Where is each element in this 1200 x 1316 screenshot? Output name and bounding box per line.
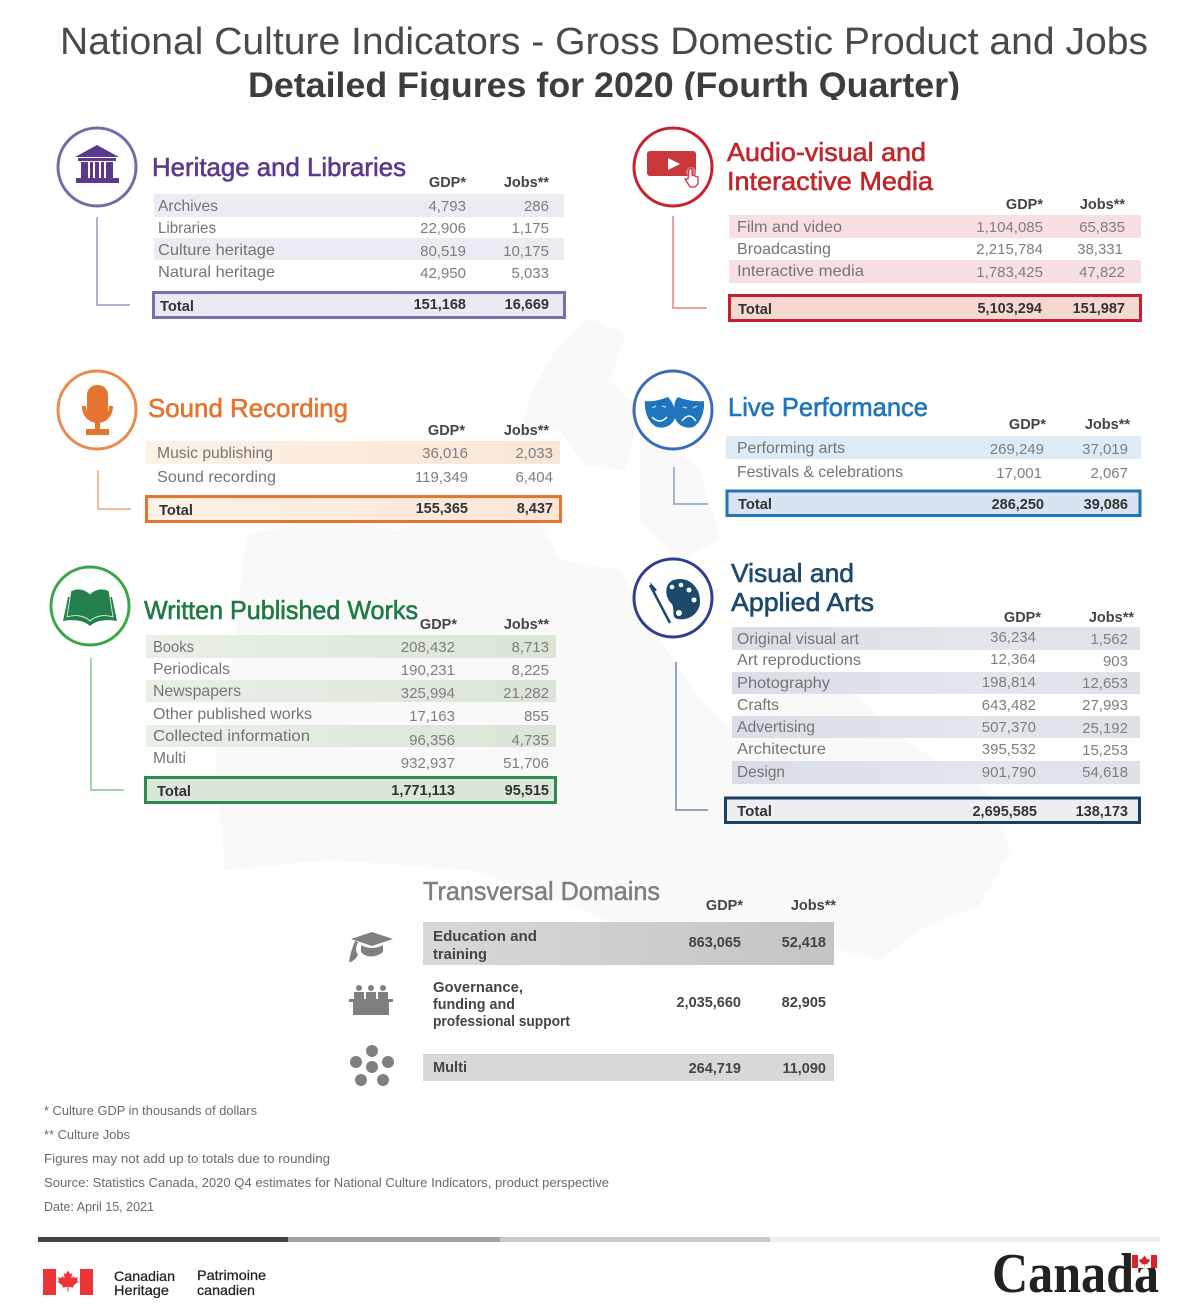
- heading: Heritage and Libraries: [152, 152, 406, 182]
- footnotes: Date: April 15, 2021: [44, 1199, 154, 1214]
- table rows: 17,163: [409, 708, 455, 725]
- table rows: 37,019: [1082, 441, 1128, 458]
- table rows: 12,653: [1082, 675, 1128, 692]
- column headers: Jobs**: [1085, 417, 1130, 433]
- table rows: 47,822: [1079, 264, 1125, 281]
- table rows: Festivals & celebrations: [737, 464, 903, 481]
- column headers: Jobs**: [504, 617, 549, 633]
- table rows: 325,994: [401, 685, 455, 702]
- heading: Audio-visual and: [727, 137, 926, 167]
- title: Detailed Figures for 2020 (Fourth Quarter): [248, 66, 960, 105]
- table rows: 119,349: [415, 469, 468, 486]
- table rows: Broadcasting: [737, 241, 831, 258]
- column headers: GDP*: [1009, 417, 1046, 433]
- row: education and training: training: [433, 946, 487, 963]
- column headers: Jobs**: [1080, 197, 1125, 213]
- column headers: [429, 175, 549, 191]
- column headers: Jobs**: [504, 175, 549, 191]
- panel: Live Performance: [634, 371, 1141, 516]
- footnotes: ** Culture Jobs: [44, 1127, 130, 1142]
- table rows: 901,790: [982, 764, 1036, 781]
- row: governance: [433, 979, 826, 1030]
- total row: 95,515: [505, 783, 549, 799]
- background map of Canada: [215, 318, 1010, 960]
- total row: Total: [738, 301, 772, 318]
- row: multi: Multi: [433, 1059, 467, 1076]
- table rows: 17,001: [996, 465, 1042, 482]
- table rows: 643,482: [982, 697, 1036, 714]
- table rows: 198,814: [982, 674, 1036, 691]
- total row: [726, 798, 1140, 822]
- table rows: Crafts: [737, 697, 779, 714]
- icon: microphone: [58, 371, 136, 449]
- total row: [154, 292, 564, 318]
- table rows: Newspapers: [153, 683, 241, 700]
- table rows: 10,175: [503, 243, 549, 260]
- row: multi: 11,090: [782, 1061, 826, 1077]
- row: governance: 2,035,660: [676, 995, 741, 1011]
- table rows: 4,793: [428, 198, 466, 215]
- logo: Canada wordmark: Canada: [992, 1243, 1159, 1305]
- logo: Canadian Heritage signature: canadien: [197, 1282, 255, 1298]
- footnotes: Figures may not add up to totals due to rounding: [44, 1151, 330, 1166]
- table rows: Architecture: [737, 741, 826, 758]
- footer divider bar: [38, 1237, 1160, 1242]
- total row: 5,103,294: [977, 301, 1042, 317]
- total row: Total: [737, 803, 772, 820]
- column headers: [1009, 417, 1130, 433]
- table rows: Photography: [737, 675, 830, 692]
- table rows: 38,331: [1077, 241, 1123, 258]
- total row: 151,987: [1073, 301, 1125, 317]
- heading: Transversal Domains: [423, 876, 660, 906]
- row: governance: Governance,: [433, 979, 523, 996]
- table rows: 1,562: [1090, 631, 1128, 648]
- panel: Sound Recording: [58, 371, 560, 522]
- footnotes: Source: Statistics Canada, 2020 Q4 estimates for National Culture Indicators, product perspective: [44, 1175, 609, 1190]
- table rows: Libraries: [158, 220, 216, 237]
- table rows: Film and video: [737, 219, 842, 236]
- table rows: 36,234: [990, 629, 1036, 646]
- column headers: [428, 423, 549, 439]
- footnotes: [44, 1103, 609, 1214]
- icon: open book: [51, 567, 129, 645]
- table rows: [154, 194, 564, 282]
- table rows: 36,016: [422, 445, 468, 462]
- heading: [727, 137, 934, 196]
- table rows: Culture heritage: [158, 242, 275, 259]
- table rows: Art reproductions: [737, 652, 861, 669]
- table rows: 65,835: [1079, 219, 1125, 236]
- table rows: Multi: [153, 750, 186, 767]
- table rows: 269,249: [990, 441, 1044, 458]
- table rows: 903: [1103, 653, 1128, 670]
- logo: Canadian Heritage signature: Heritage: [114, 1282, 169, 1298]
- table rows: 96,356: [409, 732, 455, 749]
- column headers: GDP*: [429, 175, 466, 191]
- table rows: 6,404: [515, 469, 553, 486]
- column headers: [706, 898, 836, 914]
- column headers: GDP*: [706, 898, 743, 914]
- table rows: 208,432: [401, 639, 455, 656]
- table rows: 27,993: [1082, 697, 1128, 714]
- table rows: Collected information: [153, 728, 310, 745]
- table rows: 25,192: [1082, 720, 1128, 737]
- panel: Heritage and Libraries: [58, 128, 564, 318]
- table rows: 1,104,085: [976, 219, 1043, 236]
- total row: 151,168: [414, 297, 466, 313]
- row: governance: professional support: [433, 1013, 570, 1030]
- total row: 8,437: [517, 501, 553, 517]
- table rows: 190,231: [401, 662, 455, 679]
- table rows: 80,519: [420, 243, 466, 260]
- panel: Written Published Works: [51, 567, 556, 802]
- icon: graduation cap: [349, 932, 393, 962]
- table rows: 8,225: [511, 662, 549, 679]
- total row: 286,250: [992, 497, 1044, 513]
- total row: Total: [157, 783, 191, 800]
- column headers: Jobs**: [791, 898, 836, 914]
- column headers: Jobs**: [1089, 610, 1134, 626]
- table rows: Periodicals: [153, 661, 230, 678]
- column headers: GDP*: [428, 423, 465, 439]
- icon: people at a table: [349, 985, 393, 1015]
- table rows: 8,713: [511, 639, 549, 656]
- table rows: 1,783,425: [976, 264, 1043, 281]
- table rows: 2,067: [1090, 465, 1128, 482]
- total row: [727, 491, 1140, 516]
- table rows: 2,215,784: [976, 241, 1043, 258]
- row: education and training: 863,065: [689, 935, 741, 951]
- table rows: 51,706: [503, 755, 549, 772]
- table rows: 21,282: [503, 685, 549, 702]
- row: governance: funding and: [433, 996, 515, 1013]
- table rows: 855: [524, 708, 549, 725]
- table rows: 1,175: [511, 220, 549, 237]
- table rows: 286: [524, 198, 549, 215]
- table rows: [146, 441, 560, 486]
- row: multi: 264,719: [689, 1061, 741, 1077]
- heading: Visual and: [731, 558, 854, 588]
- table rows: [726, 436, 1141, 482]
- column headers: [1004, 610, 1134, 626]
- total row: [146, 778, 556, 802]
- icon: video player with pointer: [634, 128, 712, 206]
- table rows: Archives: [158, 198, 218, 215]
- logo: Canadian Heritage signature: [43, 1267, 266, 1298]
- icon: cluster of dots: [350, 1045, 394, 1086]
- table rows: Interactive media: [737, 263, 864, 280]
- column headers: GDP*: [1004, 610, 1041, 626]
- table rows: Performing arts: [737, 440, 845, 457]
- panel: Audio-visual and Interactive Media: [634, 128, 1141, 320]
- total row: Total: [738, 496, 772, 513]
- column headers: [420, 617, 549, 633]
- table rows: 4,735: [511, 732, 549, 749]
- total row: 16,669: [505, 297, 549, 313]
- row: education and training: [423, 922, 834, 965]
- title: [63, 26, 1147, 100]
- table rows: [146, 635, 556, 772]
- icon: museum building: [58, 128, 136, 206]
- table rows: 507,370: [982, 719, 1036, 736]
- table rows: [732, 627, 1140, 784]
- column headers: GDP*: [1006, 197, 1043, 213]
- footnotes: * Culture GDP in thousands of dollars: [44, 1103, 257, 1118]
- table rows: Other published works: [153, 706, 312, 723]
- heading: Interactive Media: [727, 166, 934, 196]
- logo: Canadian Heritage signature: Canadian: [114, 1268, 175, 1284]
- column headers: [1006, 197, 1125, 213]
- total row: Total: [159, 502, 193, 519]
- heading: Live Performance: [728, 392, 928, 422]
- table rows: Advertising: [737, 719, 815, 736]
- total row: [730, 296, 1140, 320]
- table rows: 12,364: [990, 651, 1036, 668]
- icon: theatre masks: [634, 371, 712, 449]
- table rows: Books: [153, 639, 194, 656]
- table rows: Music publishing: [157, 445, 273, 462]
- title: National Culture Indicators - Gross Domestic Product and Jobs: [60, 21, 1148, 63]
- column headers: Jobs**: [504, 423, 549, 439]
- icon: palette and brush: [634, 559, 712, 637]
- row: education and training: 52,418: [782, 935, 826, 951]
- row: multi: [423, 1054, 834, 1081]
- row: governance: 82,905: [782, 995, 826, 1011]
- table rows: 395,532: [982, 741, 1036, 758]
- heading: [731, 558, 874, 617]
- table rows: Sound recording: [157, 469, 276, 486]
- logo: Canadian Heritage signature: Patrimoine: [197, 1267, 266, 1283]
- total row: 155,365: [416, 501, 468, 517]
- total row: [146, 496, 560, 522]
- table rows: 22,906: [420, 220, 466, 237]
- table rows: 15,253: [1082, 742, 1128, 759]
- column headers: GDP*: [420, 617, 457, 633]
- heading: Sound Recording: [148, 393, 348, 423]
- table rows: 932,937: [401, 755, 455, 772]
- table rows: 5,033: [511, 265, 549, 282]
- panel: Transversal Domains: [349, 876, 836, 1086]
- heading: Applied Arts: [731, 587, 874, 617]
- row: education and training: Education and: [433, 928, 537, 945]
- table rows: 54,618: [1082, 764, 1128, 781]
- table rows: 42,950: [420, 265, 466, 282]
- total row: 2,695,585: [972, 804, 1037, 820]
- table rows: Design: [737, 764, 785, 781]
- total row: 1,771,113: [391, 783, 455, 799]
- panel: Visual and Applied Arts: [634, 558, 1140, 822]
- table rows: Original visual art: [737, 631, 860, 648]
- total row: 39,086: [1084, 497, 1128, 513]
- table rows: [729, 215, 1141, 283]
- table rows: 2,033: [515, 445, 553, 462]
- total row: 138,173: [1076, 804, 1128, 820]
- total row: Total: [160, 298, 194, 315]
- table rows: Natural heritage: [158, 264, 275, 281]
- heading: Written Published Works: [144, 595, 418, 625]
